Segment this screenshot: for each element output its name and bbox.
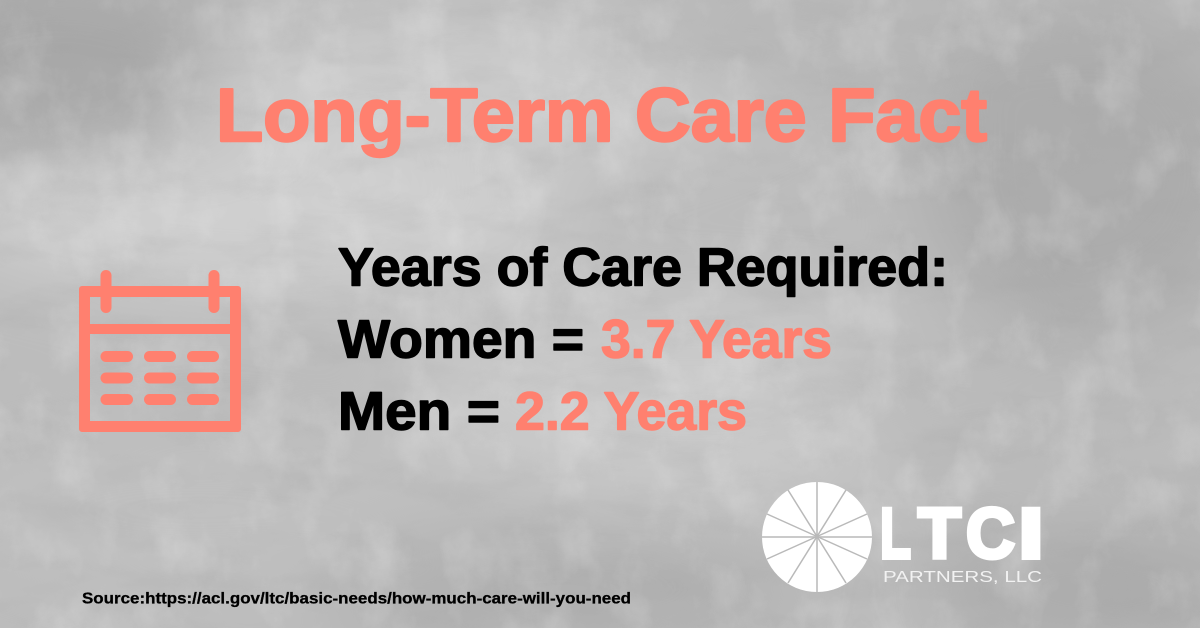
stat: women: 3.7 Years xyxy=(601,310,832,370)
logo wordmark: LTCI: L xyxy=(880,495,911,574)
source citation: Source:https://acl.gov/ltc/basic-needs/how-much-care-will-you-need xyxy=(82,590,631,608)
logo: LTCI Partners xyxy=(762,482,1044,592)
logo wordmark: LTCI xyxy=(880,495,1044,574)
logo wordmark: LTCI: C xyxy=(966,495,1015,574)
logo wordmark: LTCI: I xyxy=(1018,495,1044,574)
stat: women xyxy=(338,310,832,370)
heading: years of care required: Years of Care Required: xyxy=(338,238,948,298)
icon: calendar xyxy=(79,270,241,432)
logo tagline: PARTNERS, LLC xyxy=(883,569,1042,586)
stat: men xyxy=(338,382,747,442)
title: Long-Term Care Fact xyxy=(216,73,987,157)
stat: women: Women = xyxy=(338,310,584,370)
logo wordmark: LTCI: T xyxy=(918,495,961,574)
stat: men: Men = xyxy=(338,382,500,442)
text block: years of care required xyxy=(338,238,948,442)
stat: men: 2.2 Years xyxy=(515,382,747,442)
logo mark: segmented circle xyxy=(762,482,872,592)
